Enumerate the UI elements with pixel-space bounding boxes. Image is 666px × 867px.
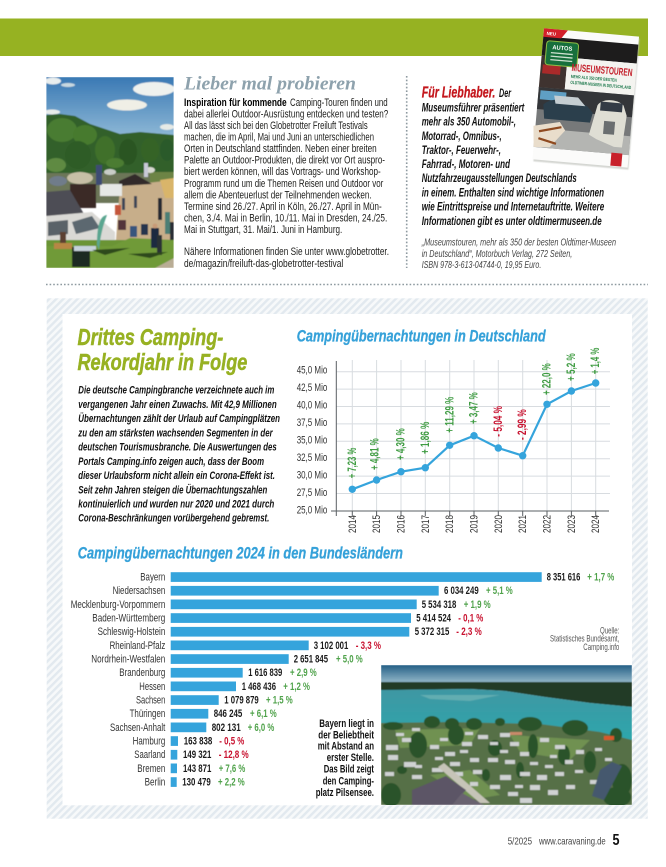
yearly change labels: - 5,04 %	[491, 406, 505, 437]
yearly change labels: + 7,23 %	[345, 447, 359, 478]
book reference	[421, 238, 616, 271]
caption: Pilsensee: Bayern liegt in	[319, 718, 374, 730]
yearly change labels: + 11,29 %	[442, 396, 456, 433]
text block: Für Liebhaber: Fahrrad-, Motoren- und	[422, 159, 511, 171]
values and changes: + 5,0 %	[336, 654, 363, 666]
text block: intro: Übernachtungen zählt der Urlaub auf Campingplätzen	[78, 412, 280, 425]
values and changes: - 2,3 %	[456, 626, 482, 638]
x axis years	[347, 515, 602, 533]
source note: Camping.info	[583, 642, 619, 652]
heading: bar chart: Campingübernachtungen 2024 in den Bundesländern	[78, 544, 403, 562]
values and changes: + 1,2 %	[283, 681, 310, 693]
y axis labels	[297, 364, 327, 516]
text block: Globetrotter festivals: Nähere Informationen finden Sie unter www.globetrotter.	[184, 246, 389, 258]
state labels: Sachsen	[136, 694, 165, 706]
text block: Globetrotter festivals: chen, 3./4. Mai in Berlin, 10./11. Mai in Dresden, 24./25.	[184, 212, 387, 224]
text block: Für Liebhaber: Für Liebhaber.	[422, 84, 495, 102]
text block: Globetrotter festivals: dabei allerlei Outdoor-Ausrüstung entdecken und testen?	[184, 108, 388, 120]
values and changes: - 0,1 %	[458, 612, 483, 624]
footer: www.caravaning.de	[538, 836, 606, 848]
x axis years: 2020	[493, 515, 505, 533]
values and changes: 6 034 249	[444, 585, 479, 597]
book cover: Museumstouren	[530, 28, 640, 170]
caption: Pilsensee: den Camping-	[323, 776, 374, 788]
text block: Für Liebhaber: Traktor-, Feuerwehr-,	[422, 145, 501, 157]
y axis labels: 35,0 Mio	[297, 434, 327, 446]
y axis labels: 30,0 Mio	[297, 469, 327, 481]
footer: 5	[612, 832, 620, 849]
book reference: in Deutschland“, Motorbuch Verlag, 272 Seiten,	[422, 249, 572, 260]
footer	[508, 832, 620, 849]
values and changes: + 7,6 %	[219, 763, 245, 775]
values and changes: 1 616 839	[248, 667, 282, 679]
values and changes: 1 079 879	[224, 694, 259, 706]
values and changes: + 5,1 %	[486, 585, 513, 597]
x axis years: 2023	[566, 515, 578, 533]
yearly change labels: + 4,81 %	[368, 438, 382, 470]
state labels: Bremen	[137, 763, 165, 775]
text block: Globetrotter festivals	[184, 97, 389, 270]
values and changes: 5 414 524	[416, 612, 452, 624]
panel: camping statistics	[47, 298, 648, 819]
book cover: Museumstouren: MEHR ALS 350 DER BESTEN	[571, 74, 617, 83]
values and changes: - 0,5 %	[219, 736, 244, 748]
text block: Für Liebhaber: Nutzfahrzeugausstellungen Deutschlands	[422, 173, 577, 185]
yearly change labels: + 3,47 %	[466, 392, 480, 424]
yearly change labels: + 1,4 %	[588, 347, 602, 374]
bar chart: overnight stays by federal state	[71, 572, 614, 788]
state labels: Niedersachsen	[113, 585, 165, 597]
values and changes: 130 479	[182, 776, 211, 788]
x axis years: 2024	[590, 515, 602, 533]
state labels: Rheinland-Pfalz	[110, 640, 165, 652]
text block: intro	[78, 385, 280, 525]
book cover: Museumstouren: NEU	[546, 31, 556, 37]
y axis labels: 42,5 Mio	[297, 382, 327, 394]
x axis years: 2015	[371, 515, 383, 533]
heading: Drittes Camping-Rekordjahr in Folge: Drittes Camping-	[78, 324, 223, 350]
book reference: ISBN 978-3-613-04744-0, 19,95 Euro.	[422, 260, 541, 271]
text block: Globetrotter festivals: machen, die im April, Mai und Juni an unterschiedlichen	[184, 132, 374, 144]
text block: intro: Corona-Beschränkungen vorübergehend gebremst.	[78, 513, 269, 525]
state labels: Berlin	[145, 776, 165, 788]
values and changes	[182, 572, 614, 788]
data line	[349, 379, 599, 493]
values and changes: + 1,7 %	[587, 572, 614, 584]
values and changes: + 1,9 %	[464, 599, 491, 611]
text block: Globetrotter festivals: Mai in Stuttgart, 31. Mai/1. Juni in Hamburg.	[184, 224, 342, 236]
state labels: Saarland	[134, 749, 165, 761]
yearly change labels: + 4,30 %	[394, 428, 408, 460]
text block: intro: Die deutsche Campingbranche verzeichnete auch im	[78, 385, 274, 397]
text block: Globetrotter festivals: allem die Abenteuerlust der Teilnehmenden wecken.	[184, 189, 372, 201]
text block: Globetrotter festivals: All das lässt sich bei den Globetrotter Freiluft Testivals	[184, 120, 368, 132]
values and changes: + 2,9 %	[290, 667, 317, 679]
footer: 5/2025	[508, 836, 532, 848]
text block: Globetrotter festivals: Orten in Deutschland stattfinden. Neben einer breiten	[184, 143, 377, 155]
yearly change labels: + 5,2 %	[564, 353, 578, 381]
heading: line chart: Campingübernachtungen in Deutschland	[297, 328, 546, 346]
state labels: Schleswig-Holstein	[98, 626, 165, 638]
values and changes: + 6,0 %	[248, 722, 274, 734]
x axis years: 2014	[347, 515, 359, 533]
source note: Quelle:	[600, 626, 619, 636]
state labels: Nordrhein-Westfalen	[91, 654, 165, 666]
text block: Für Liebhaber: Motorrad-, Omnibus-,	[422, 131, 502, 143]
values and changes: + 6,1 %	[250, 708, 277, 720]
y axis labels: 40,0 Mio	[297, 399, 327, 411]
text block: intro: deutschen Tourismusbranche. Die Auswertungen des	[78, 442, 277, 454]
caption: Pilsensee: erster Stelle.	[327, 752, 374, 764]
green header bar	[0, 18, 648, 56]
yearly change labels	[345, 347, 602, 478]
values and changes: 846 245	[214, 708, 242, 720]
source note	[550, 626, 619, 652]
text block: Für Liebhaber	[422, 84, 605, 228]
values and changes: - 12,8 %	[219, 749, 249, 761]
state labels: Thüringen	[130, 708, 165, 720]
x axis years: 2016	[396, 515, 408, 533]
y axis labels: 27,5 Mio	[297, 487, 327, 499]
y axis labels: 25,0 Mio	[297, 504, 327, 516]
text block: intro: dieser Urlaubsform nicht allein ein Corona-Effekt ist.	[78, 470, 275, 482]
x axis years: 2022	[542, 515, 554, 533]
y axis labels: 37,5 Mio	[297, 417, 327, 429]
heading: Lieber mal probieren: Lieber mal probieren	[183, 74, 356, 94]
x axis years: 2017	[420, 515, 432, 533]
values and changes: 149 321	[183, 749, 211, 761]
values and changes: 163 838	[184, 736, 212, 748]
line chart: overnight stays in Germany	[297, 347, 610, 533]
yearly change labels: + 1,86 %	[418, 421, 432, 454]
text block: Globetrotter festivals: Termine sind 26./27. April in Köln, 26./27. April in Mün-	[184, 201, 382, 213]
text block: Globetrotter festivals: de/magazin/freiluft-das-globetrotter-testival	[184, 258, 343, 270]
state labels: Hamburg	[133, 736, 165, 748]
state labels	[71, 572, 165, 788]
caption: Pilsensee	[316, 718, 374, 799]
caption: Pilsensee: Das Bild zeigt	[324, 764, 374, 776]
photo: camping festival	[44, 77, 175, 268]
text block: Globetrotter festivals: Inspiration für kommende	[184, 97, 287, 109]
state labels: Brandenburg	[119, 667, 165, 679]
text block: intro: Portals Camping.info zeigen auch, dass der Boom	[78, 456, 264, 468]
source note: Statistisches Bundesamt,	[550, 634, 619, 644]
state labels: Hessen	[139, 681, 165, 693]
text block: Globetrotter festivals: biert werden können, will das Vortrags- und Workshop-	[184, 166, 381, 178]
yearly change labels: - 2,99 %	[515, 409, 529, 440]
heading: Drittes Camping-Rekordjahr in Folge	[78, 324, 247, 375]
values and changes: 2 651 845	[294, 654, 328, 666]
text block: intro: vergangenen Jahr einen Zuwachs. Mit 42,9 Millionen	[78, 399, 277, 411]
text block: Für Liebhaber: mehr als 350 Automobil-,	[422, 117, 516, 129]
values and changes: 3 102 001	[314, 640, 348, 652]
values and changes: + 1,5 %	[266, 694, 293, 706]
x axis years: 2018	[444, 515, 456, 533]
values and changes: - 3,3 %	[356, 640, 381, 652]
y axis labels: 45,0 Mio	[297, 364, 327, 376]
text block: intro: zu den am stärksten wachsenden Segmenten in der	[78, 428, 273, 440]
text block: Globetrotter festivals: Programm rund um die Themen Reisen und Outdoor vor	[184, 178, 384, 190]
caption: Pilsensee: platz Pilsensee.	[316, 787, 374, 799]
caption: Pilsensee: mit Abstand an	[318, 741, 374, 753]
text block: Für Liebhaber: Der	[499, 88, 511, 100]
caption: Pilsensee: der Beliebtheit	[318, 730, 374, 742]
state labels: Bayern	[140, 572, 165, 584]
values and changes: 143 871	[183, 763, 211, 775]
bars	[171, 572, 542, 787]
x axis years: 2021	[517, 515, 529, 533]
state labels: Mecklenburg-Vorpommern	[71, 599, 165, 611]
text block: Globetrotter festivals: Palette an Outdoor-Produkten, die direkt vor Ort auspro-	[184, 155, 385, 167]
values and changes: 5 534 318	[422, 599, 456, 611]
book cover: Museumstouren: OLDTIMER-MUSEEN IN DEUTSCHLAND	[570, 80, 632, 90]
state labels: Baden-Württemberg	[92, 612, 165, 624]
text block: intro: Seit zehn Jahren steigen die Übernachtungszahlen	[78, 483, 267, 496]
x axis years: 2019	[468, 515, 480, 533]
state labels: Sachsen-Anhalt	[110, 722, 165, 734]
values and changes: 802 131	[212, 722, 241, 734]
text block: intro: kontinuierlich und wurden nur 2020 und 2021 durch	[78, 498, 275, 510]
values and changes: 5 372 315	[415, 626, 449, 638]
yearly change labels: + 22,0 %	[540, 363, 554, 395]
values and changes: 1 468 436	[242, 681, 276, 693]
photo: Campingplatz Pilsensee	[381, 665, 632, 807]
book cover: Museumstouren: AUTOS	[552, 45, 572, 53]
values and changes: 8 351 616	[547, 572, 580, 584]
text block: Für Liebhaber: Museumsführer präsentiert	[422, 102, 525, 114]
y axis labels: 32,5 Mio	[297, 452, 327, 464]
text block: Globetrotter festivals: Camping-Touren finden und	[290, 97, 388, 109]
heading: Drittes Camping-Rekordjahr in Folge: Rekordjahr in Folge	[78, 349, 247, 375]
values and changes: + 2,2 %	[218, 776, 245, 788]
